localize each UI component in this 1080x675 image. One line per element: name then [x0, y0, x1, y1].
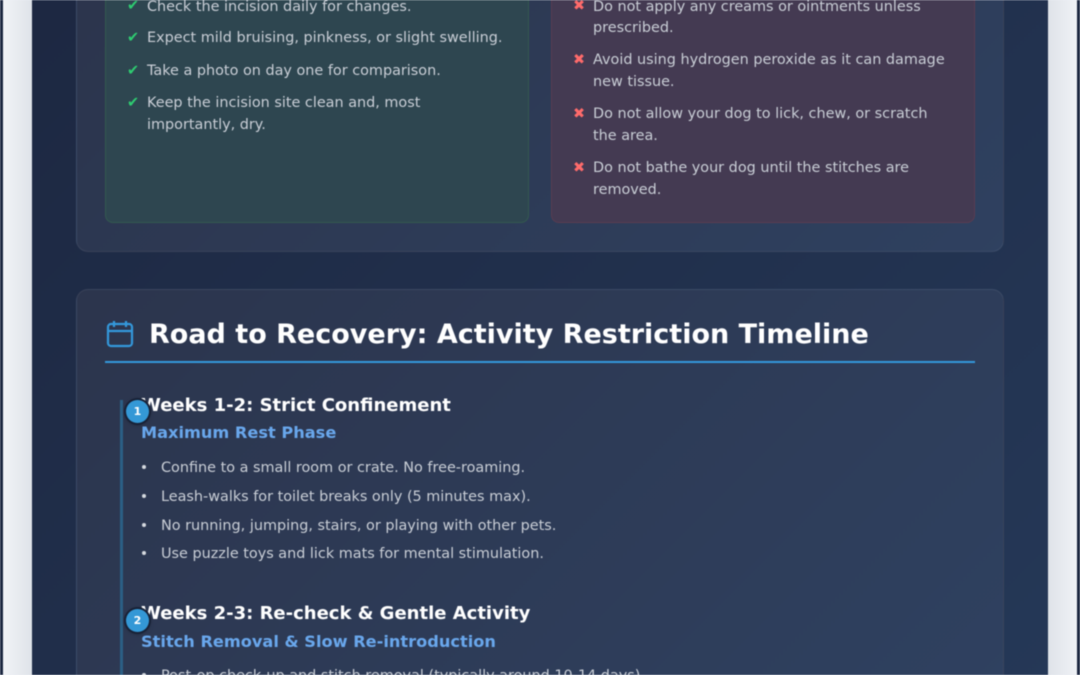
don't list items: ✖: [573, 52, 585, 68]
heading underline: [105, 361, 975, 363]
phase 1: Maximum Rest Phase: [141, 423, 336, 442]
right page edge: [1077, 0, 1080, 675]
phase 2: Stitch Removal & Slow Re-introduction: [141, 632, 496, 651]
phase 1: Use puzzle toys and lick mats for mental stimulation.: [161, 546, 544, 562]
icon: calendar: [106, 320, 134, 348]
phase 1: Weeks 1-2: Strict Confinement: [141, 394, 451, 416]
don't list items: Do not bathe your dog until the stitches are: [593, 160, 909, 176]
panel: incision care: [76, 0, 1004, 252]
phase 2: [124, 603, 645, 675]
do list items: ✔: [127, 63, 139, 79]
panel: do list: [105, 0, 529, 223]
phase 1: Confine to a small room or crate. No free-roaming.: [161, 460, 525, 476]
don't list items: Avoid using hydrogen peroxide as it can damage: [593, 52, 945, 68]
do list items: ✔: [127, 30, 139, 46]
phase 1: [124, 394, 556, 562]
don't list items: ✖: [573, 106, 585, 122]
left page edge: [0, 0, 3, 675]
do list items: [127, 0, 502, 133]
don't list items: ✖: [573, 160, 585, 176]
phase 2: 2: [134, 614, 141, 627]
don't list items: new tissue.: [593, 74, 675, 90]
don't list items: [573, 0, 945, 198]
do list items: importantly, dry.: [147, 117, 266, 133]
heading: timeline: Road to Recovery: Activity Restriction Timeline: [149, 319, 869, 350]
panel: recovery timeline: [76, 289, 1004, 675]
phase 1: 1: [134, 405, 141, 418]
panel: don't list: [551, 0, 975, 223]
do list items: Keep the incision site clean and, most: [147, 95, 420, 111]
do list items: Take a photo on day one for comparison.: [147, 63, 441, 79]
don't list items: removed.: [593, 182, 661, 198]
don't list items: prescribed.: [593, 20, 674, 36]
don't list items: Do not allow your dog to lick, chew, or scratch: [593, 106, 927, 122]
do list items: Expect mild bruising, pinkness, or slight swelling.: [147, 30, 502, 46]
phase 2: Weeks 2-3: Re-check & Gentle Activity: [141, 603, 530, 624]
left page margin: [0, 0, 32, 675]
right page margin: [1048, 0, 1080, 675]
don't list items: the area.: [593, 128, 658, 144]
phase 1: Leash-walks for toilet breaks only (5 minutes max).: [161, 489, 531, 505]
phase 1: No running, jumping, stairs, or playing with other pets.: [161, 518, 556, 534]
timeline line: [120, 400, 123, 675]
do list items: ✔: [127, 95, 139, 111]
